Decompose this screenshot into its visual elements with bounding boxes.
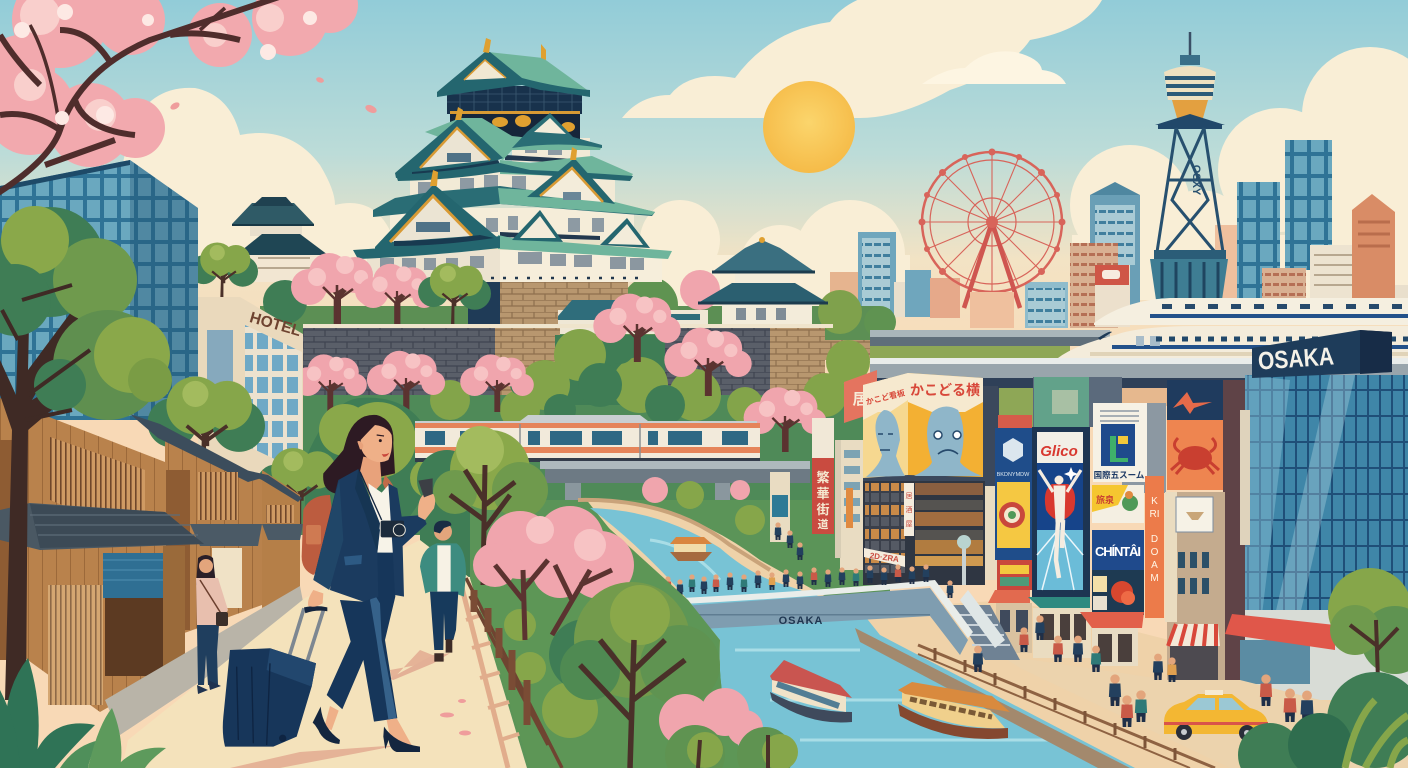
palm fronds bottom left <box>0 658 166 768</box>
upper elevated track <box>870 330 1110 368</box>
hotel building <box>198 297 303 480</box>
sign stack: CHINTAI: 旅泉 <box>1096 494 1114 505</box>
cherry tree on bank <box>473 506 634 640</box>
traveller woman <box>223 415 435 752</box>
right turret and gatehouse <box>558 237 828 334</box>
sign column: blue and yellow: BKDNYMDW <box>997 472 1030 478</box>
orange vertical sign: K <box>1151 496 1158 507</box>
Dotonbori signage block <box>770 330 1408 700</box>
house middle <box>130 414 262 640</box>
striped awning <box>1166 624 1220 646</box>
orange vertical sign: D <box>1151 534 1158 545</box>
castle third roof <box>373 147 655 217</box>
commuter train on viaduct <box>415 415 810 531</box>
orange roof boat <box>898 682 1010 739</box>
falling petals <box>169 76 378 115</box>
castle top dark floor <box>447 86 582 146</box>
red vertical signs: 繁 <box>816 470 830 485</box>
small woman pedestrian <box>196 555 228 694</box>
red vertical signs: 街 <box>816 502 830 517</box>
castle top roof <box>437 38 590 97</box>
boats <box>670 537 1010 739</box>
building behind signs <box>840 386 998 580</box>
house near <box>0 398 204 712</box>
left glass tower <box>0 160 198 420</box>
Glico runner billboard: Glico <box>1040 443 1078 460</box>
dark shop building: 2D·ZRA <box>869 551 900 564</box>
billboard: faces <box>863 373 983 478</box>
bridge <box>682 580 1005 655</box>
sign: red top left <box>844 370 877 423</box>
clouds <box>100 0 1408 310</box>
hills behind castle <box>260 270 896 360</box>
big green tree on bank <box>549 582 720 768</box>
wooden fence <box>466 578 562 768</box>
hair <box>323 415 395 493</box>
railing <box>918 645 1215 768</box>
icon: Tsutenkaku tower: OSXY <box>1190 165 1202 196</box>
bottom trees on bank <box>659 688 798 768</box>
hands and feet <box>308 494 435 752</box>
icon: crab <box>1171 438 1219 474</box>
icon: Ferris wheel <box>918 148 1066 328</box>
midground trees left <box>148 376 346 525</box>
background behind signs <box>985 388 1168 430</box>
tree behind man <box>417 426 548 585</box>
stairs <box>950 605 1020 660</box>
dark shop building: 酒 <box>906 506 912 514</box>
right bank garden <box>466 520 752 768</box>
shinkansen front <box>1058 326 1408 360</box>
backpack <box>302 475 399 575</box>
orange vertical sign: M <box>1150 573 1159 584</box>
big tree left <box>0 206 172 700</box>
orange vertical sign: O <box>1151 547 1159 558</box>
red vertical signs <box>770 418 841 558</box>
red awning <box>1225 614 1335 650</box>
white blouse <box>368 483 393 553</box>
bridge: OSAKA <box>779 615 823 627</box>
small castle left <box>232 197 328 282</box>
street pedestrians <box>973 615 1313 727</box>
crab restaurant building <box>1165 380 1247 682</box>
wooden machiya houses <box>0 398 303 712</box>
neck and face <box>357 425 392 497</box>
cherry blossom branches top left <box>0 0 358 195</box>
dark shop building: 屋 <box>906 520 912 528</box>
dark shop building <box>863 481 985 585</box>
red vertical signs: 道 <box>818 517 828 531</box>
sign: red top left: 居 <box>852 391 868 408</box>
OSAKA glass tower: OSAKA <box>1257 342 1335 376</box>
main elevated track <box>870 358 1408 390</box>
crowd on embankment <box>652 522 953 598</box>
ground greenery <box>300 329 880 535</box>
tree right side <box>1328 568 1408 680</box>
rolling suitcase <box>223 606 327 747</box>
billboard: faces: かこどる横 <box>910 382 980 398</box>
viaduct <box>540 461 810 531</box>
orange vertical sign <box>1145 476 1164 618</box>
foliage bottom right <box>1238 672 1408 768</box>
sign column: blue and yellow <box>988 415 1032 653</box>
orange vertical sign: RI <box>1150 509 1160 520</box>
phone <box>418 478 433 497</box>
sign stack: CHINTAI <box>1080 403 1166 666</box>
sun <box>763 81 855 173</box>
castle lower walls <box>367 138 662 282</box>
icon: Tsutenkaku tower <box>1150 32 1228 300</box>
stone castle wall <box>303 324 920 396</box>
billboard: faces: かこど看板 <box>865 387 906 407</box>
street promenade <box>855 605 1408 768</box>
bank and water <box>470 477 1408 768</box>
castle stone base <box>468 278 628 326</box>
hotel building: HOTEL <box>248 309 303 340</box>
house far <box>245 470 303 608</box>
canal wall <box>855 628 1130 768</box>
dark shop building: 居 <box>906 492 912 500</box>
far bank shrubs <box>642 477 765 535</box>
icon: yellow taxi <box>1164 690 1268 741</box>
red roof boat <box>770 660 852 723</box>
foliage behind woman <box>305 398 483 577</box>
orange vertical sign: A <box>1151 560 1158 571</box>
trees behind stone wall <box>189 242 491 326</box>
walking path <box>105 540 527 768</box>
castle second roof <box>395 107 633 181</box>
icon: camera <box>360 472 405 537</box>
distant boat <box>670 537 712 561</box>
castle bottom roof <box>353 170 672 259</box>
OSAKA glass tower <box>1166 330 1408 700</box>
shinkansen rear <box>1094 298 1408 325</box>
sign stack: CHINTAI: 国際五スーム <box>1094 470 1145 480</box>
Osaka castle <box>353 38 672 326</box>
trousers <box>327 553 397 722</box>
river canal <box>590 508 1135 768</box>
jacket <box>313 469 427 602</box>
red vertical signs: 華 <box>816 486 830 501</box>
cherry trees on slope <box>293 294 826 452</box>
bullet trains <box>870 298 1408 390</box>
Glico runner billboard <box>1028 377 1122 658</box>
sign stack: CHINTAI: CHÍNTÂI <box>1095 544 1141 559</box>
man walking <box>390 521 466 680</box>
skyline buildings <box>830 140 1408 328</box>
